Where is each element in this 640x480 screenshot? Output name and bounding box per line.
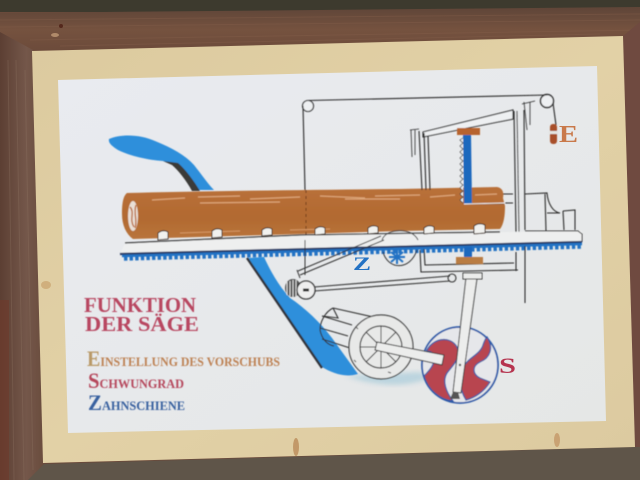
toothed rack <box>120 242 582 258</box>
feed connecting rod <box>314 274 456 291</box>
lower water race <box>247 257 430 385</box>
legend item: E: EINSTELLUNG DES VORSCHUBS <box>87 346 280 371</box>
upper water flume <box>109 135 214 191</box>
drive gear <box>382 231 418 266</box>
title: DER SÄGE <box>85 312 199 336</box>
legend item: Z: ZAHNSCHIENE <box>88 390 185 415</box>
title: FUNKTION <box>84 293 196 317</box>
saw blade <box>456 128 505 264</box>
saw mechanism diagram <box>109 94 582 403</box>
label: E: E <box>559 122 578 148</box>
carriage rail <box>120 231 582 254</box>
flywheel <box>422 327 498 403</box>
label: Z: Z <box>353 254 371 275</box>
feed ratchet drum <box>285 279 315 299</box>
E weight <box>549 124 558 144</box>
log rollers <box>158 224 485 240</box>
legend item: S: SCHWUNGRAD <box>88 368 184 393</box>
white painted panel <box>58 66 606 433</box>
feed lever <box>297 236 384 278</box>
vertical crank rod <box>450 273 482 399</box>
wheel connecting shaft <box>375 342 444 365</box>
water wheel <box>349 315 413 379</box>
saw frame with pulley cord <box>302 94 575 303</box>
title <box>84 293 199 336</box>
label: S: S <box>499 353 516 378</box>
legend <box>87 346 280 415</box>
water wheel paddles <box>320 308 373 348</box>
log <box>122 187 505 240</box>
